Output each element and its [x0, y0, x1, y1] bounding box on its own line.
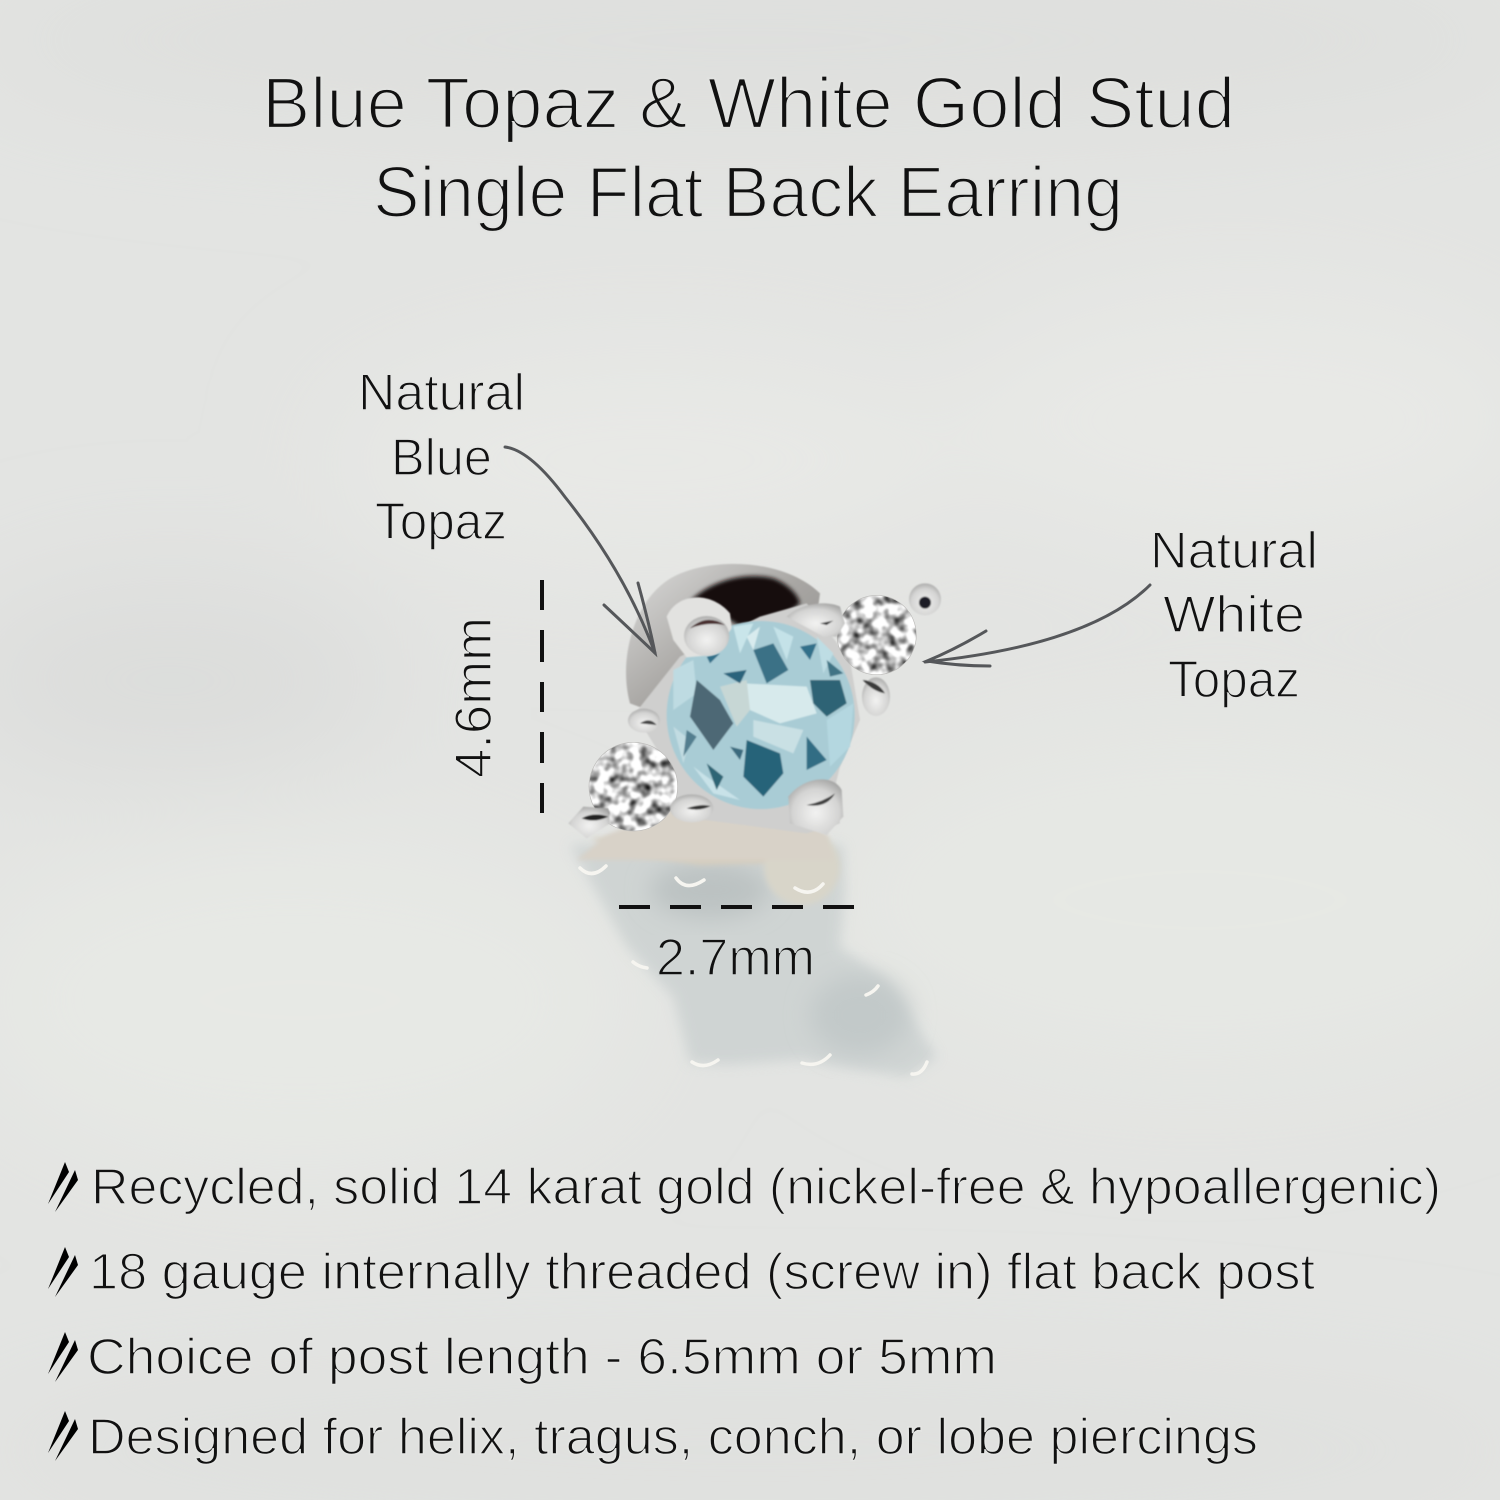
arrow: to blue topaz [505, 447, 655, 653]
top left prong [667, 597, 732, 657]
prongs [568, 583, 941, 838]
callout: natural white topaz label: Topaz [1168, 651, 1300, 709]
left prong [628, 709, 660, 733]
callout: natural blue topaz label: Topaz [375, 493, 507, 551]
right prong [862, 677, 890, 716]
bullet list [48, 1158, 1441, 1465]
width dimension line [619, 905, 854, 909]
bottom right prong [788, 779, 843, 835]
bullet 2: 18 gauge internally threaded (screw in) flat back post [89, 1243, 1315, 1300]
top tip prong [909, 583, 941, 615]
callout: natural white topaz label [1150, 522, 1318, 709]
arrow: to white topaz [925, 585, 1150, 666]
callout: natural white topaz label: White [1163, 586, 1305, 644]
bottom prong [670, 794, 713, 822]
title [262, 64, 1235, 233]
upper white topaz [836, 595, 917, 675]
dark opening behind the stone [690, 576, 800, 627]
bullet 3: Choice of post length - 6.5mm or 5mm [87, 1328, 997, 1385]
blue topaz main stone [667, 621, 855, 809]
lower white topaz [587, 740, 680, 833]
earring product photo [568, 564, 941, 860]
top right prong [787, 603, 845, 637]
back disc of the post [626, 564, 820, 720]
height label: 4.6mm [445, 617, 503, 778]
bullet 4: Designed for helix, tragus, conch, or lobe piercings [88, 1408, 1258, 1465]
title: Blue Topaz & White Gold Stud [262, 64, 1235, 144]
bottom left tip prong [568, 807, 610, 838]
title: Single Flat Back Earring [373, 153, 1123, 233]
earring reflection [570, 829, 937, 1077]
base of the setting [577, 807, 833, 860]
callout: natural white topaz label: Natural [1150, 522, 1318, 580]
height dimension line [540, 580, 544, 813]
callout: natural blue topaz label: Blue [391, 429, 492, 487]
callout: natural blue topaz label: Natural [358, 364, 525, 422]
metal frame around stone [635, 603, 860, 833]
callout: natural blue topaz label [358, 364, 525, 551]
width label: 2.7mm [656, 929, 815, 987]
bullet 1: Recycled, solid 14 karat gold (nickel-free & hypoallergenic) [91, 1158, 1441, 1215]
